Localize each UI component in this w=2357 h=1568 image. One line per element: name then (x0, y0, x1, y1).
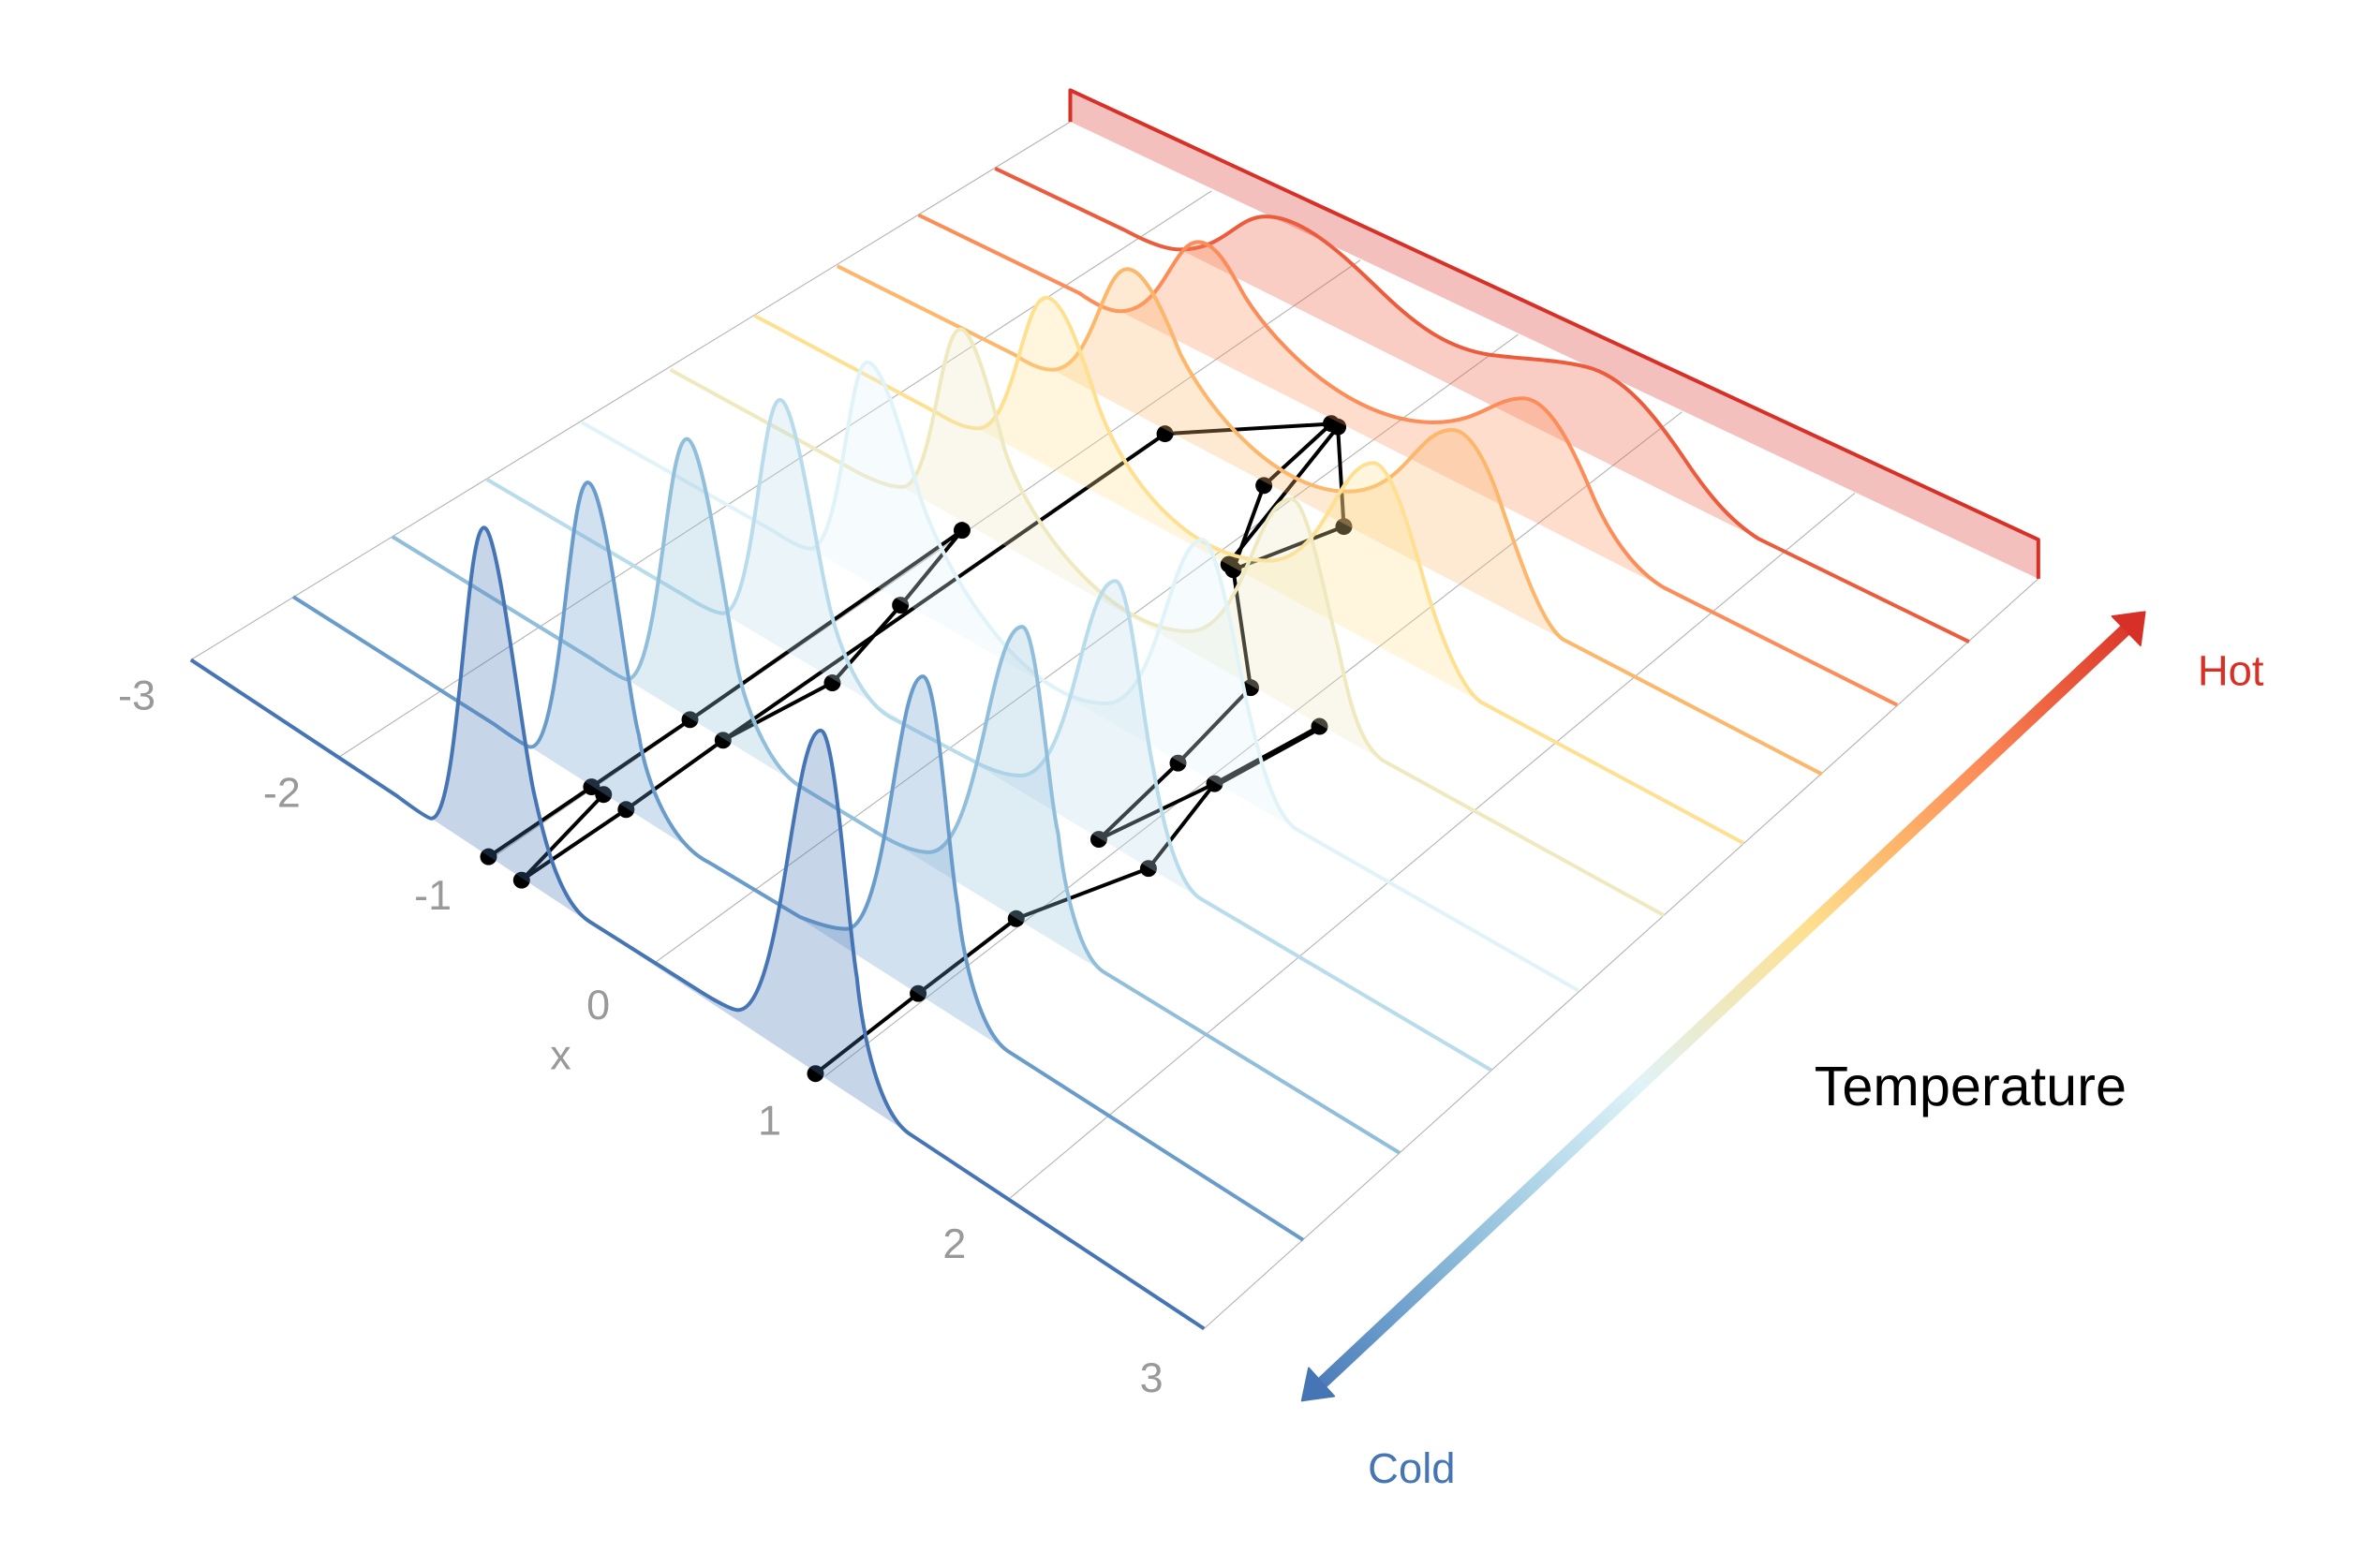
x axis tick labels: -1 (414, 871, 452, 919)
ridge 1: coldest (191, 527, 1204, 1329)
x axis tick labels: 2 (942, 1220, 966, 1267)
hottest ridge: red back wall (1070, 90, 2038, 579)
x axis tick labels: -2 (263, 769, 301, 817)
label: Temperature: Temperature (1815, 1055, 2127, 1117)
ridge 10 (995, 169, 1969, 642)
ridge 7 (755, 298, 1743, 843)
ridge 3 (393, 439, 1400, 1153)
ridge 2 (293, 482, 1303, 1240)
ridge 4 (487, 400, 1491, 1071)
ridge 9 (918, 215, 1897, 705)
label: Hot: Hot (2198, 647, 2264, 695)
sampler trajectory: black path with points (481, 415, 1352, 1082)
x axis tick labels (118, 671, 1164, 1401)
ridge 8 (838, 266, 1822, 774)
ridge 6 (671, 329, 1664, 915)
temperature arrow (1302, 612, 2145, 1401)
grid lines at x ticks (191, 122, 2038, 1329)
x axis tick labels: 1 (758, 1097, 781, 1145)
label: Cold: Cold (1368, 1444, 1456, 1492)
x axis title: x (550, 1031, 571, 1079)
ridge 5 (582, 362, 1579, 990)
x axis tick labels: 3 (1140, 1354, 1164, 1401)
x axis tick labels: -3 (118, 671, 156, 718)
x axis tick labels: 0 (586, 981, 610, 1028)
